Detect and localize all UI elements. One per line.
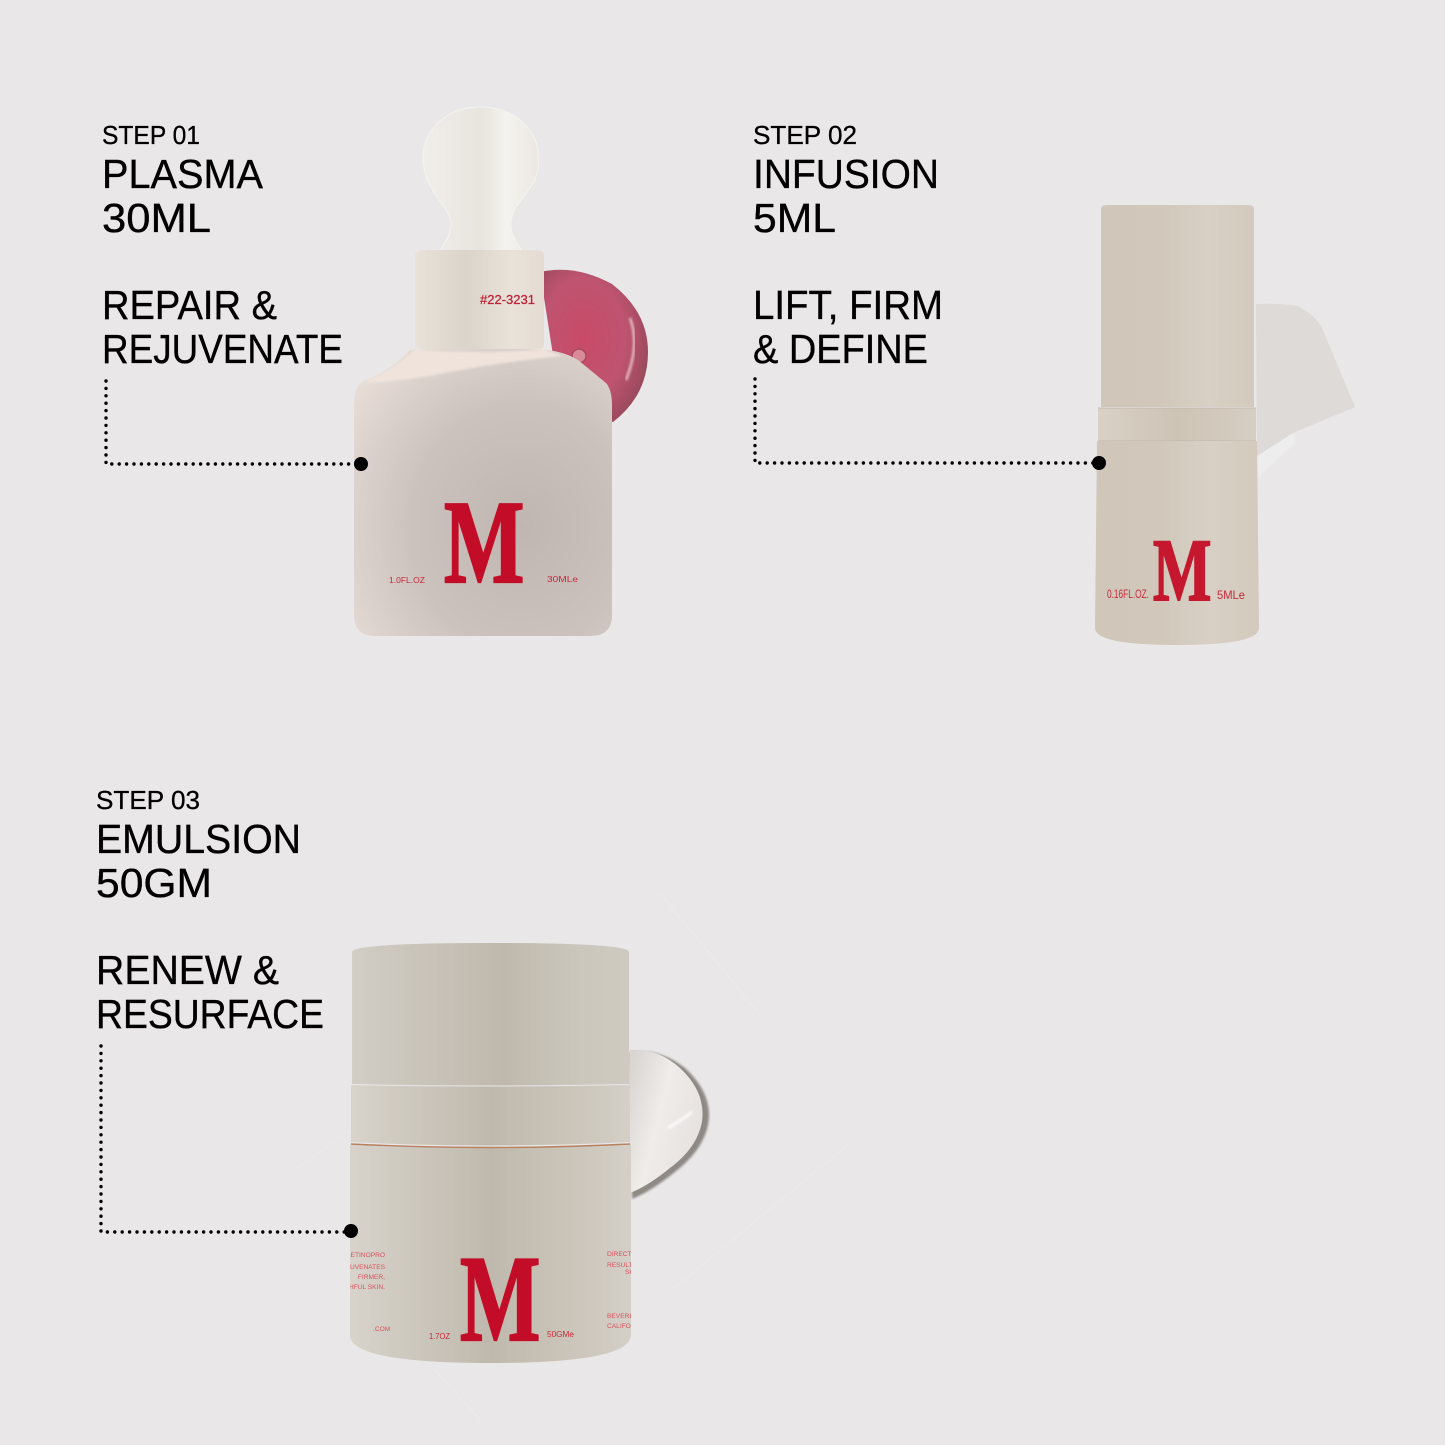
batch number: #22-3231: [480, 293, 535, 307]
product: infusion stick: [1095, 205, 1355, 645]
volume labels: [1107, 587, 1245, 602]
jar labels: YOUTHFUL SKIN.: [331, 1284, 385, 1291]
volume labels: [389, 574, 578, 585]
bottle body: [354, 348, 612, 636]
jar base: [350, 1144, 631, 1363]
step 02 heading: LIFT, FIRM: [753, 282, 943, 328]
jar labels: REJUVENATES: [337, 1264, 386, 1271]
serum blob: [540, 270, 648, 422]
product: emulsion jar: [327, 943, 709, 1367]
jar labels: RESULTS, USE: [607, 1262, 655, 1269]
volume labels: 50GMe: [547, 1329, 574, 1339]
jar labels: FIRMER,: [358, 1274, 385, 1281]
step 02 heading: INFUSION: [753, 151, 939, 197]
product: plasma bottle: [354, 107, 648, 636]
cream swatch: [630, 1050, 709, 1199]
jar labels: DIRECTIONS: [607, 1251, 648, 1258]
volume labels: 1.0FL.OZ: [389, 575, 425, 585]
step 01 heading: 30ML: [102, 195, 211, 241]
step 01 heading: [102, 120, 343, 372]
step 03 heading: EMULSION: [96, 816, 301, 862]
step 02 heading: [753, 120, 943, 372]
step 03 heading: RENEW &: [96, 947, 279, 993]
step 03 heading: [96, 785, 324, 1037]
copper seam: [351, 1144, 630, 1148]
volume labels: [429, 1329, 574, 1341]
jar lid: [352, 943, 629, 1086]
step 02 heading: STEP 02: [753, 120, 857, 150]
volume labels: 0.16FL.OZ.: [1107, 587, 1149, 601]
M logo: M: [460, 1231, 540, 1367]
stick band: [1098, 408, 1256, 441]
step 02 heading: 5ML: [753, 195, 836, 241]
jar labels: WITH RETINOPRO: [327, 1252, 385, 1259]
step 02 heading: & DEFINE: [753, 326, 928, 372]
step 03 heading: 50GM: [96, 860, 212, 906]
volume labels: 30MLe: [547, 574, 578, 584]
M logo: M: [444, 477, 524, 608]
jar band: [351, 1085, 630, 1146]
jar labels: CALIFORNIA: [607, 1323, 647, 1330]
cream smear: [1256, 304, 1355, 478]
volume labels: 5MLe: [1217, 588, 1245, 602]
collar: [415, 250, 544, 349]
step 03 heading: RESURFACE: [96, 991, 324, 1037]
connector: step 01: [106, 381, 368, 471]
step 03 heading: STEP 03: [96, 785, 200, 815]
jar labels: .COM: [373, 1326, 390, 1333]
volume labels: 1.7OZ: [429, 1331, 450, 1341]
step 01 heading: REPAIR &: [102, 282, 277, 328]
stick cap: [1101, 205, 1254, 407]
step 01 heading: STEP 01: [102, 120, 200, 150]
M logo: M: [1153, 521, 1211, 620]
stick base: [1095, 441, 1259, 645]
jar labels: BEVERLY HILLS: [607, 1313, 658, 1320]
connector: step 02: [755, 379, 1106, 470]
step 01 heading: REJUVENATE: [102, 326, 343, 372]
jar labels: SKIN: [625, 1269, 641, 1276]
dropper bulb: [423, 107, 539, 251]
jar labels: [350, 1252, 631, 1331]
step 01 heading: PLASMA: [102, 151, 264, 197]
connector: step 03: [101, 1046, 358, 1238]
